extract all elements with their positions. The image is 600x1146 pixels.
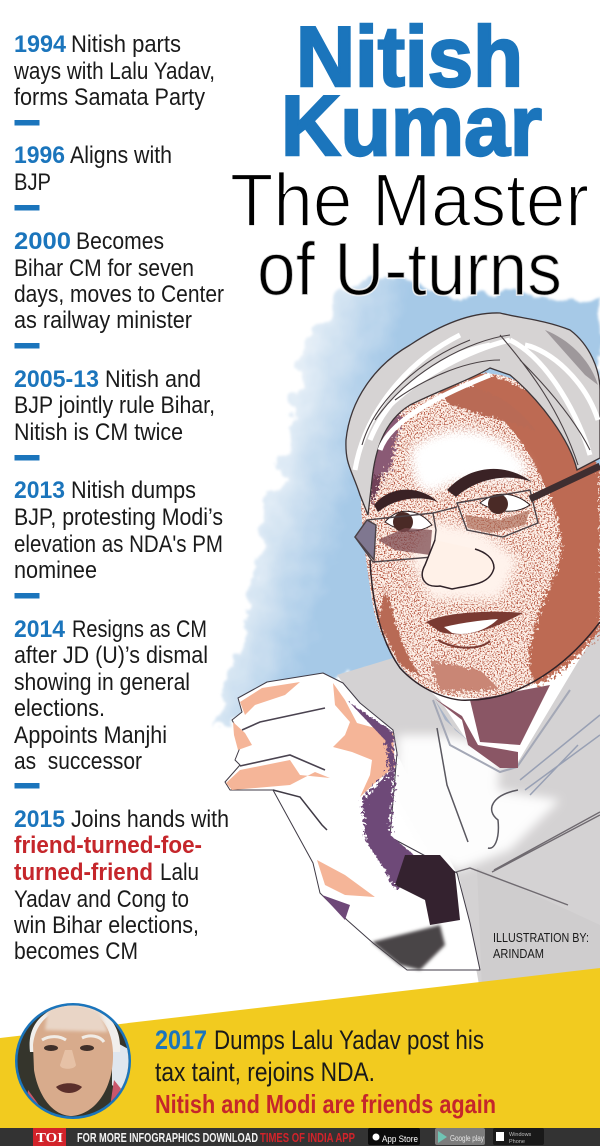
event: 2005-13: BJP jointly rule Bihar, xyxy=(14,392,215,419)
text: 2017 event: Nitish and Modi are friends again xyxy=(155,1089,496,1119)
nose xyxy=(422,540,494,589)
event: 2000: days, moves to Center xyxy=(14,281,224,308)
footer text: TIMES OF INDIA APP xyxy=(260,1130,355,1145)
event: 1996 xyxy=(14,142,172,196)
event: 2000: as railway minister xyxy=(14,307,192,334)
event: 2014: after JD (U)’s dismal xyxy=(14,642,208,669)
event: 2014: Appoints Manjhi xyxy=(14,722,167,749)
heading: The Master of U-turns: The Master xyxy=(230,158,589,242)
event: 1994: ways with Lalu Yadav, xyxy=(13,58,215,85)
mouth xyxy=(426,612,523,648)
logo: TOI xyxy=(33,1128,66,1146)
event: 2000 xyxy=(14,228,224,334)
event: 2000: Bihar CM for seven xyxy=(14,255,194,282)
badge: App Store xyxy=(368,1128,420,1145)
event: 2005-13: Nitish and xyxy=(105,366,201,393)
photo: Lalu Yadav xyxy=(15,1003,131,1120)
eyes and brows xyxy=(374,469,532,555)
divider bar xyxy=(14,205,40,210)
footer text: FOR MORE INFOGRAPHICS DOWNLOAD xyxy=(77,1130,258,1145)
event: 1996: BJP xyxy=(14,169,51,196)
event: 2014: as successor xyxy=(14,748,142,775)
divider bar xyxy=(14,343,40,348)
text: 2017 event: 2017 xyxy=(155,1025,207,1055)
title xyxy=(230,10,589,311)
event: 1994 xyxy=(13,31,215,111)
logo: TOI: TOI xyxy=(36,1131,63,1146)
badge: App Store: App Store xyxy=(382,1134,418,1144)
neck xyxy=(434,685,550,768)
event: 2013: BJP, protesting Modi’s xyxy=(14,504,223,531)
event: 2013: nominee xyxy=(14,557,97,584)
event: 2014: showing in general xyxy=(14,669,190,696)
watercolour wash xyxy=(215,276,600,730)
event: 2005-13: 2005-13 xyxy=(14,366,99,393)
event: 2014 xyxy=(14,616,208,775)
divider bar xyxy=(14,783,40,788)
hair xyxy=(346,313,600,515)
event: 2015: turned-friend xyxy=(14,859,153,886)
badge: Windows Phone: Phone xyxy=(509,1139,525,1145)
event: 2015: Lalu xyxy=(160,859,199,886)
event: 2000: 2000 xyxy=(14,228,71,255)
text: 2017 event: Dumps Lalu Yadav post his xyxy=(214,1025,484,1055)
event: 2015: win Bihar elections, xyxy=(13,912,199,939)
heading: Nitish Kumar: Nitish xyxy=(296,10,523,105)
event: 1994: Nitish parts xyxy=(71,31,181,58)
divider bar xyxy=(14,593,40,598)
event: 1994: forms Samata Party xyxy=(14,84,205,111)
timeline xyxy=(13,31,229,965)
divider bar xyxy=(14,455,40,460)
event: 1996: 1996 xyxy=(14,142,65,169)
face xyxy=(355,365,600,705)
event: 2014: Resigns as CM xyxy=(72,616,207,643)
heading: The Master of U-turns xyxy=(230,158,589,311)
event: 1994: 1994 xyxy=(14,31,67,58)
text: 2017 event: tax taint, rejoins NDA. xyxy=(155,1057,375,1087)
event: 2005-13 xyxy=(14,366,215,446)
event: 1996: Aligns with xyxy=(70,142,172,169)
text: 2017 event xyxy=(155,1025,496,1119)
badge: Windows Phone: Windows xyxy=(509,1132,532,1138)
illustration credit xyxy=(493,930,589,961)
heading: Nitish Kumar xyxy=(281,10,542,174)
glasses xyxy=(355,466,600,562)
event: 2015: Yadav and Cong to xyxy=(14,886,189,913)
event: 2013: 2013 xyxy=(14,477,65,504)
event: 2013 xyxy=(14,477,223,584)
divider bar xyxy=(14,120,40,126)
badge: Windows Phone xyxy=(493,1128,544,1145)
event: 2015: friend-turned-foe- xyxy=(14,832,202,859)
event: 2015 xyxy=(13,806,229,965)
event: 2013: elevation as NDA's PM xyxy=(14,531,223,558)
illustration: Nitish Kumar portrait xyxy=(215,276,600,990)
event: 2005-13: Nitish is CM twice xyxy=(14,419,183,446)
badge: Google play xyxy=(435,1128,485,1145)
yellow panel: 2017 xyxy=(0,968,600,1128)
event: 2015: 2015 xyxy=(14,806,65,833)
event: 2013: Nitish dumps xyxy=(71,477,196,504)
event: 2015: becomes CM xyxy=(14,938,138,965)
heading: The Master of U-turns: of U-turns xyxy=(257,227,562,311)
hand xyxy=(225,673,480,970)
event: 2014: elections. xyxy=(14,695,105,722)
heading: Nitish Kumar: Kumar xyxy=(281,79,542,174)
illustration credit: ARINDAM xyxy=(493,946,544,961)
event: 2015: Joins hands with xyxy=(71,806,229,833)
jacket xyxy=(337,625,600,990)
footer bar xyxy=(0,1128,600,1146)
event: 2000: Becomes xyxy=(76,228,164,255)
event: 2014: 2014 xyxy=(14,616,66,643)
badge: Google play: Google play xyxy=(450,1133,485,1143)
